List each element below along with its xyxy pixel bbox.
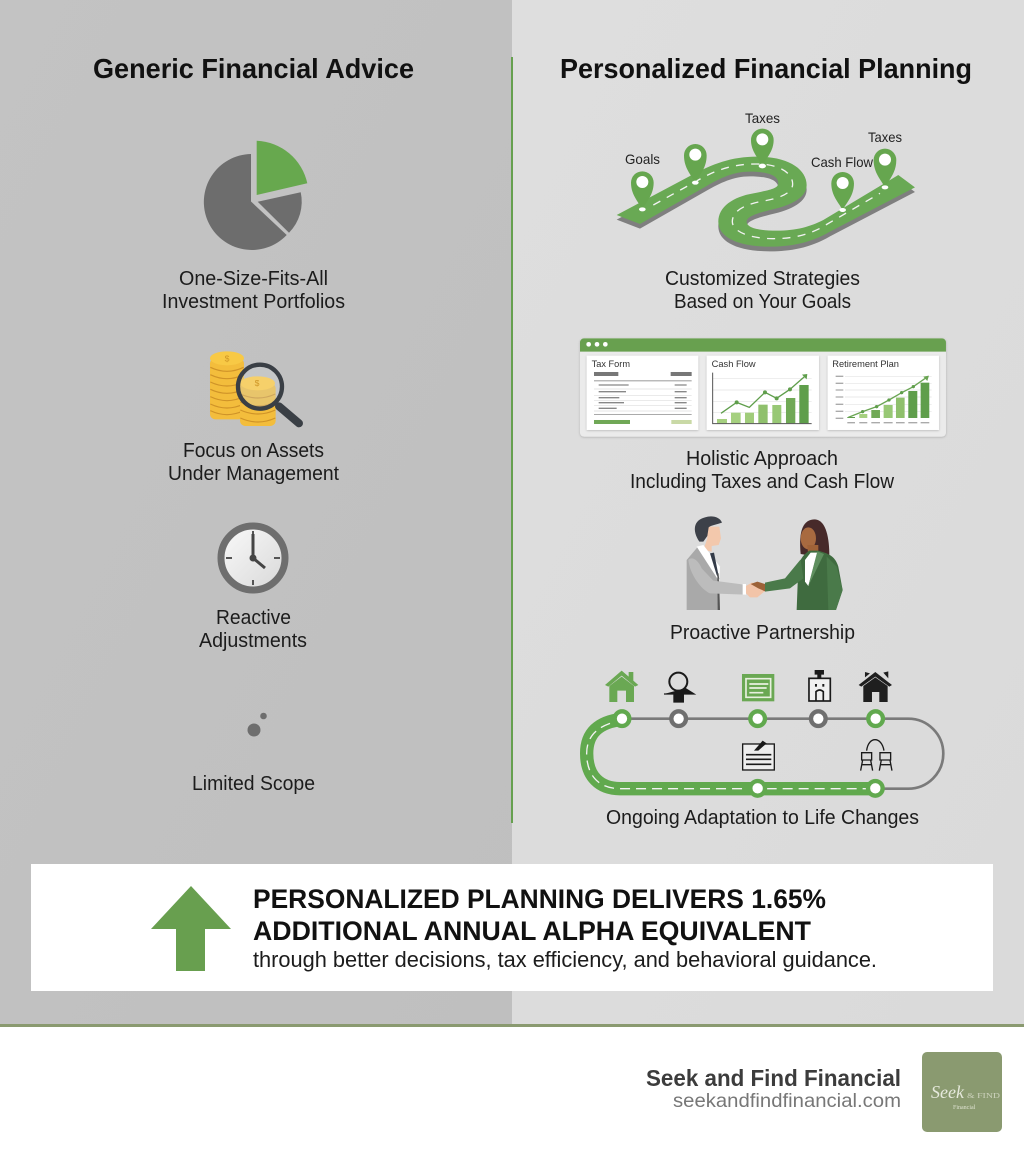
panel: right background [512,0,1024,1024]
icon: black house [859,671,892,702]
panel: dashboard window [580,338,946,437]
label: reactive adjustments: Reactive [216,607,291,629]
footer url: seekandfindfinancial.com [673,1090,901,1112]
icon: two dots [248,713,267,736]
icon: coins with magnifier: $ [225,353,230,363]
pin: cash flow [831,172,854,212]
icon: coins with magnifier: $ [255,378,260,388]
label: one-size-fits-all [162,268,345,313]
clasped hands [746,583,765,597]
road label: taxes right: Taxes [868,129,902,145]
icon: winding road with pins [617,129,915,251]
arrow: up [151,886,231,971]
logo: & FIND [967,1092,1000,1100]
callout subtext: through better decisions, tax efficiency, and behavioral guidance. [253,947,877,972]
pin: taxes right [874,149,896,189]
label: focus on assets: Focus on Assets [183,440,324,462]
card: tax form [587,356,698,430]
road label: taxes: Taxes [745,110,780,126]
card: retirement plan chart: Retirement Plan [832,359,899,369]
pin: second [684,144,707,185]
heading: personalized: Personalized Financial Planning [560,53,972,84]
icon: green document [742,674,774,701]
label: one-size-fits-all: Investment Portfolios [162,291,345,313]
man [687,516,746,610]
chart: life-change timeline [587,670,943,796]
label: holistic approach [630,448,895,493]
card: tax form: Tax Form [592,359,630,369]
label: proactive partnership: Proactive Partnership [670,622,855,644]
callout headline: PERSONALIZED PLANNING DELIVERS 1.65% [253,884,826,914]
icon: clipboard [743,741,774,770]
icon: magnifier person [664,673,694,702]
label: focus on assets [168,440,339,485]
label: holistic approach: Holistic Approach [686,448,838,470]
road label: cash flow: Cash Flow [811,154,874,170]
panel: left background [0,0,512,1024]
logo: Seek [931,1082,965,1102]
label: customized strategies: Based on Your Goals [674,291,851,313]
card: retirement plan chart [828,356,939,430]
node row [615,711,883,796]
callout headline [253,884,826,946]
pin: goals [631,171,654,211]
label: holistic approach: Including Taxes and Cash Flow [630,471,895,493]
label: limited scope: Limited Scope [192,773,315,795]
label: one-size-fits-all: One-Size-Fits-All [179,268,328,290]
card: cash flow chart [707,356,819,430]
woman [765,519,843,610]
label: reactive adjustments [199,607,307,652]
panel: footer [0,1024,1024,1154]
logo [922,1052,1002,1132]
label: reactive adjustments: Adjustments [199,630,307,652]
road label: goals: Goals [625,151,660,167]
heading: generic: Generic Financial Advice [93,53,414,84]
icon: pie chart [204,141,307,250]
label: ongoing adaptation: Ongoing Adaptation to Life Changes [606,807,919,829]
icon: handshake [687,516,843,610]
label: customized strategies: Customized Strategies [665,268,860,290]
logo: Financial [953,1105,976,1111]
icon: building [809,670,830,701]
label: focus on assets: Under Management [168,463,339,485]
card: cash flow chart: Cash Flow [712,359,756,369]
pin: taxes [751,129,774,168]
icon: connected pillars [861,740,892,771]
icon: clock [221,526,285,590]
footer brand name: Seek and Find Financial [646,1065,901,1091]
icon: coins with magnifier [210,351,299,426]
icon: green house [605,671,638,702]
panel: callout banner [31,864,993,991]
callout headline: ADDITIONAL ANNUAL ALPHA EQUIVALENT [253,916,811,946]
label: customized strategies [665,268,860,313]
